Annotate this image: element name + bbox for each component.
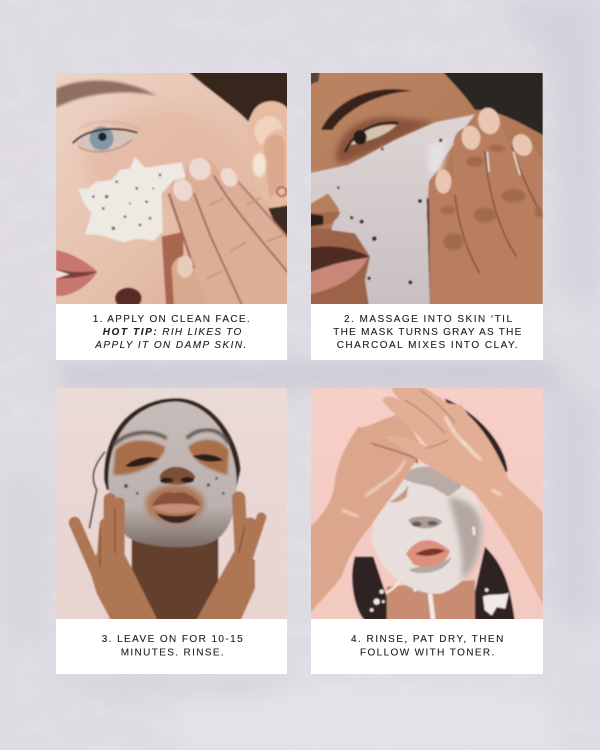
caption text: FOLLOW WITH TONER. [360, 648, 494, 658]
mask smear [78, 157, 186, 242]
right hand and arm [382, 385, 546, 610]
caption text: 4. RINSE, PAT DRY, THEN [351, 634, 503, 645]
caption text: RIH LIKES TO [162, 327, 242, 338]
panel: step 1 [53, 70, 290, 360]
caption box [311, 304, 543, 360]
clay mask on face [108, 402, 237, 547]
hand [169, 154, 290, 307]
caption text: APPLY IT ON DAMP SKIN. [94, 340, 246, 351]
photo: mask left on face [53, 385, 290, 622]
panel: step 2 [308, 70, 546, 360]
caption text [102, 634, 243, 658]
rinsing face [372, 463, 482, 594]
lower face [308, 228, 372, 307]
caption box [56, 304, 287, 360]
caption text: HOT TIP: [103, 327, 157, 338]
caption text [333, 314, 522, 351]
photo: massaging mask into skin [308, 70, 546, 307]
caption box [311, 619, 543, 674]
caption text [93, 314, 250, 351]
photo: applying mask on cheek [53, 70, 290, 309]
hands [75, 498, 261, 622]
caption box [56, 619, 287, 674]
caption text: 3. LEAVE ON FOR 10-15 [102, 634, 243, 645]
lips [152, 492, 202, 523]
photo: rinsing mask off [308, 385, 546, 622]
panel: step 4 [308, 385, 546, 674]
lips [406, 540, 450, 567]
hand [429, 105, 546, 307]
left hand and arm [308, 413, 420, 615]
panel: step 3 [53, 385, 290, 674]
caption text: 2. MASSAGE INTO SKIN ‘TIL [344, 314, 512, 325]
caption text: 1. APPLY ON CLEAN FACE. [93, 314, 250, 325]
caption text: MINUTES. RINSE. [121, 648, 224, 658]
caption text [351, 634, 503, 658]
caption text: CHARCOAL MIXES INTO CLAY. [337, 340, 518, 351]
drips and splashes [370, 527, 508, 622]
caption text: THE MASK TURNS GRAY AS THE [333, 327, 522, 338]
mask on cheek [308, 114, 475, 307]
